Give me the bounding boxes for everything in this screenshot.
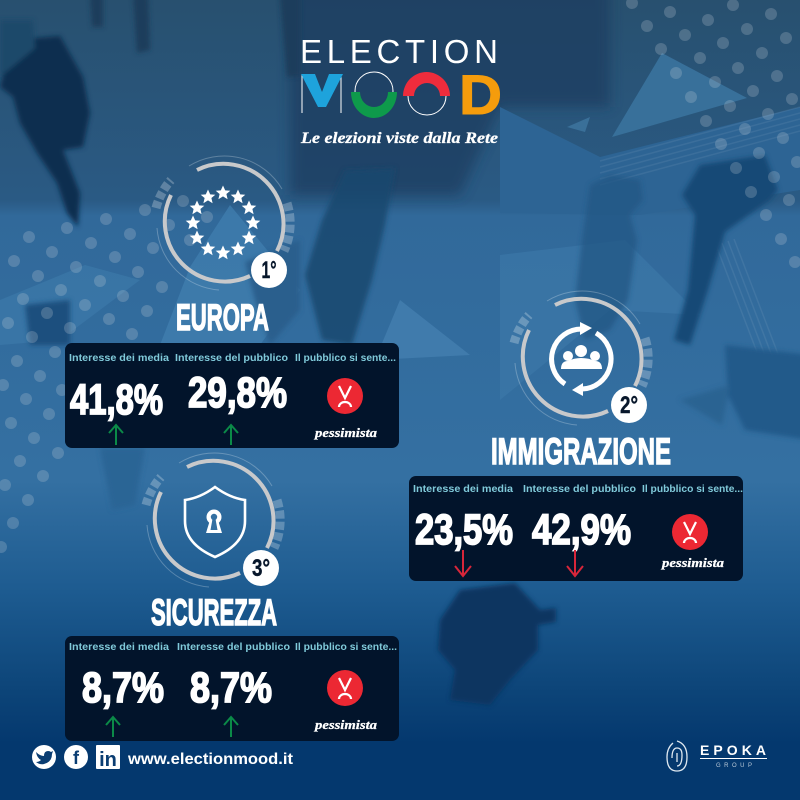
website: www.electionmood.it [127, 751, 294, 768]
icon ring: Sicurezza, rank 3 [146, 453, 280, 587]
translucent dots [0, 0, 800, 553]
wordmark: Epoka: EPOKA [700, 742, 766, 758]
sentiment text: pessimista [661, 555, 725, 570]
logo letter: O red [403, 72, 450, 115]
person center [305, 168, 395, 345]
value: pubblico: 8,7% [190, 664, 272, 712]
logo word: ELECTION: ELECTION [300, 33, 498, 70]
sentiment text: pessimista [314, 717, 378, 732]
rank badge 1: 1° [262, 257, 276, 284]
panel: Immigrazione [409, 476, 743, 581]
footer: social icons and website [32, 745, 294, 771]
icon: shield with keyhole [185, 487, 245, 557]
rank badge 2: 2° [620, 392, 638, 419]
label: sentiment: Il pubblico si sente... [295, 352, 396, 364]
light triangles [500, 240, 700, 400]
label: media: Interesse dei media [69, 641, 169, 653]
value: pubblico: 29,8% [188, 369, 287, 417]
icon: EU stars [186, 186, 260, 259]
heading: Sicurezza: SICUREZZA [151, 592, 277, 633]
heading: Immigrazione: IMMIGRAZIONE [491, 431, 671, 472]
arrow up: media [109, 425, 123, 445]
arrow up: pubblico [224, 717, 238, 737]
logo letter: O green [351, 72, 397, 118]
figure under left panel [25, 300, 70, 345]
label: pubblico: Interesse del pubblico [177, 641, 290, 653]
arrow up: pubblico [224, 425, 238, 445]
value: media: 8,7% [82, 664, 164, 712]
person right 1 [575, 175, 643, 340]
icon: pessimist face [327, 670, 363, 706]
logo letter: D: D [459, 63, 502, 126]
lower right figure [725, 345, 800, 440]
rank badge 3: 3° [252, 555, 270, 582]
icon ring: Immigrazione, rank 2 [514, 291, 648, 425]
icon: twitter [32, 745, 56, 769]
overlay band [500, 107, 800, 215]
divider [700, 758, 767, 759]
value: media: 23,5% [415, 506, 513, 554]
label: media: Interesse dei media [69, 352, 169, 364]
person right 2 [674, 155, 778, 345]
icon ring: Europa, rank 1 [156, 156, 290, 290]
label: media: Interesse dei media [413, 483, 513, 495]
wordmark: Group: GROUP [716, 763, 752, 769]
label: sentiment: Il pubblico si sente... [642, 483, 743, 495]
logo: Epoka Group [667, 741, 767, 771]
arrow up: media [106, 717, 120, 737]
sentiment text: pessimista [314, 425, 378, 440]
person top left [0, 36, 90, 227]
icon: pessimist face [672, 514, 708, 550]
icon: people with arrows [552, 322, 611, 396]
person with backpack [438, 583, 556, 705]
icon: facebook [64, 745, 88, 769]
arrow down: media [455, 550, 471, 576]
icon: pessimist face [327, 378, 363, 414]
heading: Europa: EUROPA [176, 297, 269, 338]
icon: linkedin [96, 745, 120, 771]
tagline: Le elezioni viste dalla Rete [300, 130, 498, 147]
label: pubblico: Interesse del pubblico [523, 483, 636, 495]
logo: Election Mood [300, 33, 502, 147]
value: pubblico: 42,9% [532, 506, 631, 554]
label: pubblico: Interesse del pubblico [175, 352, 288, 364]
darker upper centre [290, 0, 610, 195]
label: sentiment: Il pubblico si sente... [295, 641, 397, 653]
icon: facebook: f [73, 748, 80, 768]
icon: fingerprint [667, 741, 687, 771]
panel: Europa [65, 343, 399, 448]
icon: linkedin: in [99, 749, 117, 771]
panel: Sicurezza [65, 636, 399, 741]
value: media: 41,8% [70, 376, 163, 424]
arrow down: pubblico [567, 550, 583, 576]
